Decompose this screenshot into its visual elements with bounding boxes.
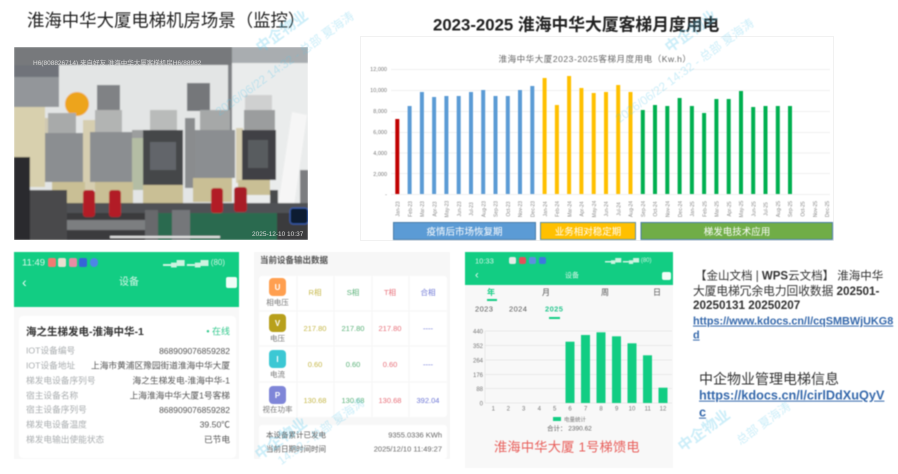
watermark: 中企物业 — [675, 406, 734, 455]
device details card: 868909076859282 — [159, 405, 230, 415]
x axis month labels: Oct-24 — [653, 201, 659, 217]
cumulative generation card — [259, 425, 447, 459]
title: monthly consumption: 2023-2025 淮海中华大厦客梯月度用电 — [433, 16, 719, 35]
period tabs: 2023 — [475, 304, 493, 313]
period tabs: 月 — [542, 288, 550, 297]
bars: stable period — [543, 76, 632, 194]
period tabs: 日 — [653, 288, 661, 297]
panel: device info screen — [14, 252, 239, 459]
panel: current output data — [254, 252, 450, 459]
legend band: recovery: 疫情后市场恢复期 — [426, 226, 503, 238]
device details card: 已节电 — [204, 435, 230, 445]
watermark: 2026/06/22 14:32 - 总部 夏海涛 — [213, 9, 357, 119]
text block: property management link — [698, 371, 885, 420]
yearly bar chart: 4 — [538, 406, 542, 412]
x axis month labels: Dec-24 — [678, 201, 684, 217]
x axis month labels: Nov-23 — [518, 201, 524, 217]
yearly bar chart: 0 — [480, 402, 484, 408]
cumulative generation card: 本设备累计已发电 — [266, 430, 326, 439]
x axis month labels: Feb-25 — [702, 201, 708, 217]
output data table: ---- — [423, 324, 433, 333]
period tabs: 2024 — [509, 304, 527, 313]
text block: WPS document link: 20250131 20250207 — [693, 299, 800, 312]
yearly bar chart: 电量统计 — [564, 416, 587, 424]
panel: machine room surveillance photo — [14, 47, 308, 240]
output data table: R相 — [309, 287, 321, 297]
yearly bar chart: 88 — [476, 387, 484, 393]
x axis month labels: Jun-24 — [604, 201, 610, 217]
x axis month labels: Mar-25 — [715, 201, 721, 217]
text block: property management link: c — [699, 406, 706, 420]
green app header: 设备 — [565, 272, 579, 280]
x axis month labels: Jul-25 — [764, 202, 770, 216]
yearly bar chart: 合计： 2390.62 — [547, 424, 592, 432]
legend band: stable — [540, 222, 636, 240]
x axis month labels: Mar-24 — [567, 201, 573, 217]
x axis month labels: Jul-24 — [616, 202, 622, 216]
legend band: recovery — [394, 222, 536, 240]
x axis month labels: Jan-25 — [690, 201, 696, 217]
output data table: 0.60 — [346, 360, 360, 369]
output data table: 217.80 — [342, 324, 364, 333]
yearly bar chart: 10 — [629, 406, 636, 412]
output data table — [262, 278, 440, 414]
output data table: U — [275, 283, 281, 292]
y axis labels: 6,000 — [373, 130, 387, 136]
bars: regeneration period — [641, 91, 792, 194]
watermark: 2026/06/22 14:32 - 总部 夏海涛 — [613, 16, 757, 126]
output data table: 视在功率 — [262, 404, 293, 414]
text block: WPS document link: 大厦电梯冗余电力回收数据 202501- — [693, 285, 879, 298]
yearly bar chart: 3 — [522, 406, 526, 412]
device details card: 海之生梯发电-淮海中华-1 — [132, 376, 230, 386]
period tabs: 周 — [601, 288, 609, 297]
yearly bar chart: 5 — [553, 406, 557, 412]
x axis month labels: Jul-23 — [469, 202, 475, 216]
red caption: 淮海中华大厦 1号梯馈电 — [494, 439, 640, 454]
x axis month labels: Dec-23 — [530, 201, 536, 217]
x axis month labels: Feb-24 — [555, 201, 561, 217]
x axis month labels: Jun-25 — [751, 201, 757, 217]
x axis month labels: Jan-24 — [543, 201, 549, 217]
green app header — [14, 252, 239, 307]
device details card: • 在线 — [206, 326, 230, 336]
device details card: 梯发电设备温度 — [26, 420, 87, 430]
device details card: 39.50℃ — [200, 420, 230, 430]
green app header: 设备 — [119, 277, 139, 288]
output data table: 217.80 — [304, 324, 326, 333]
watermark: 总部 夏海涛 — [734, 399, 793, 448]
yearly bar chart — [472, 328, 671, 432]
text block: WPS document link: d — [693, 330, 700, 342]
title: machine room: 淮海中华大厦电梯机房场景（监控） — [27, 10, 305, 30]
yearly bar chart: 440 — [473, 330, 484, 336]
x axis month labels: Apr-23 — [432, 201, 438, 217]
yearly bar chart: 6 — [568, 406, 572, 412]
yearly bar chart: 352 — [473, 344, 484, 350]
output data table: 130.68 — [342, 396, 364, 405]
x axis month labels: Aug-23 — [481, 201, 487, 217]
panel: yearly generation screen — [465, 252, 673, 468]
device details card — [19, 316, 236, 458]
yearly bar chart: 11 — [645, 406, 651, 412]
watermark: 中企物业 — [253, 7, 312, 56]
watermark: 中企物业 — [662, 7, 721, 56]
y axis labels: 10,000 — [370, 88, 387, 94]
x axis month labels: Aug-25 — [776, 201, 782, 217]
y axis labels: 2,000 — [373, 172, 387, 178]
yearly bar chart: 8 — [599, 406, 603, 412]
output data table: 合相 — [420, 287, 436, 297]
device details card: 868909076859282 — [159, 346, 230, 356]
output data table: 130.68 — [304, 396, 326, 405]
x axis month labels: Jun-23 — [457, 201, 463, 217]
period tabs: 2025 — [545, 304, 563, 313]
green app header: 10:33 — [475, 256, 494, 265]
text block: WPS document link: https://www.kdocs.cn/l/cqSMBWjUKG8 — [693, 316, 893, 328]
output data table: 0.60 — [308, 360, 322, 369]
green app header: ▂▄▆ ▂▄▆ (80) — [605, 258, 652, 264]
output data table: ---- — [423, 360, 433, 369]
x axis month labels: Jan-23 — [396, 201, 402, 217]
device details card: 梯发电输出使能状态 — [26, 435, 104, 445]
output data table: T相 — [384, 287, 396, 297]
device details card: IOT设备编号 — [26, 346, 75, 356]
x axis month labels: Sep-24 — [641, 201, 647, 217]
x axis month labels: Nov-24 — [666, 201, 672, 217]
text block: WPS document link: 【金山文档 | WPS云文档】 淮海中华 — [695, 270, 883, 282]
output data table: 130.68 — [379, 396, 401, 405]
x axis month labels: Apr-24 — [580, 201, 586, 217]
x axis month labels: Aug-24 — [629, 201, 635, 217]
period tabs: 年 — [487, 288, 495, 297]
chart title: 淮海中华大厦2023-2025客梯月度用电（Kw.h） — [499, 54, 691, 64]
yearly bar chart: 264 — [473, 358, 484, 364]
output data table: 392.04 — [417, 396, 439, 405]
output data table: I — [276, 355, 279, 364]
device details card: 宿主设备名称 — [26, 391, 78, 401]
x axis month labels: Mar-23 — [420, 201, 426, 217]
x axis month labels: Oct-25 — [800, 201, 806, 217]
panel heading: 当前设备输出数据 — [260, 255, 328, 265]
panel: machine room surveillance photo: H6(808826714) 来自好友 淮海中华大厦客梯机房H6(88982 — [33, 58, 202, 67]
yearly bar chart: 1 — [492, 406, 496, 412]
output data table: P — [275, 391, 281, 400]
device details card: IOT设备地址 — [26, 361, 75, 371]
text block: WPS document link — [692, 268, 894, 342]
x axis month labels: Sep-23 — [494, 201, 500, 217]
period tabs — [474, 287, 661, 320]
watermark: 中企物业 — [252, 414, 311, 463]
y axis labels: 12,000 — [370, 67, 387, 73]
x axis month labels: Nov-25 — [813, 201, 819, 217]
output data table: 电压 — [270, 333, 285, 343]
cumulative generation card: 9355.0336 KWh — [388, 430, 442, 439]
legend band: stable: 业务相对稳定期 — [555, 226, 621, 238]
panel: monthly electricity bar chart — [360, 36, 834, 241]
output data table: 0.60 — [383, 360, 397, 369]
text block: property management link: https://kdocs.cn/l/cirlDdXuQyV — [699, 389, 884, 403]
x axis month labels: May-24 — [592, 200, 598, 217]
green app header: ‹ — [22, 274, 27, 290]
x axis month labels: Dec-25 — [825, 201, 831, 217]
yearly bar chart: 7 — [584, 406, 588, 412]
device details card: 海之生梯发电-淮海中华-1 — [26, 326, 144, 338]
x axis month labels — [396, 200, 831, 217]
yearly bar chart: 2 — [507, 406, 511, 412]
text block: property management link: 中企物业管理电梯信息 — [699, 371, 839, 387]
panel: machine room surveillance photo: 2025-12-10 10:37 — [252, 231, 304, 238]
cumulative generation card: 当前日期时间时间 — [266, 444, 326, 453]
y axis labels: 4,000 — [373, 151, 387, 157]
x axis month labels: Oct-23 — [506, 201, 512, 217]
x axis month labels: May-23 — [445, 200, 451, 217]
y axis labels: - — [385, 192, 387, 198]
device details card: 上海淮海中华大厦1号客梯 — [130, 391, 230, 401]
output data table: 相电压 — [266, 297, 289, 307]
device details card: 上海市黄浦区豫园街道淮海中华大厦 — [91, 361, 230, 371]
watermark: 14:32 - 总部 夏海涛 — [275, 395, 367, 468]
x axis month labels: Apr-25 — [727, 201, 733, 217]
x axis month labels: Sep-25 — [788, 201, 794, 217]
output data table: V — [275, 319, 281, 328]
bars: 2023 — [395, 86, 534, 194]
green app header — [465, 252, 673, 285]
device details card: 宿主设备序列号 — [26, 405, 87, 415]
legend band: technology — [641, 222, 832, 240]
x axis month labels: Feb-23 — [408, 201, 414, 217]
yearly bar chart: 9 — [615, 406, 619, 412]
legend band: technology: 梯发电技术应用 — [704, 226, 770, 238]
y axis labels: 8,000 — [373, 109, 387, 115]
output data table: 电流 — [270, 369, 285, 379]
yearly bar chart: 176 — [473, 373, 484, 379]
green app header: ‹ — [475, 270, 479, 282]
green app header: 11:49 — [22, 257, 45, 268]
y axis labels — [370, 67, 387, 198]
output data table: 217.80 — [379, 324, 401, 333]
green app header: ▂▄▆ ▂▄▆ (80) — [163, 258, 225, 267]
output data table: S相 — [347, 287, 359, 297]
x axis month labels: May-25 — [739, 200, 745, 217]
device details card: 梯发电设备序列号 — [26, 376, 96, 386]
yearly bar chart: 12 — [660, 406, 667, 412]
cumulative generation card: 2025/12/10 11:49:27 — [374, 444, 442, 453]
